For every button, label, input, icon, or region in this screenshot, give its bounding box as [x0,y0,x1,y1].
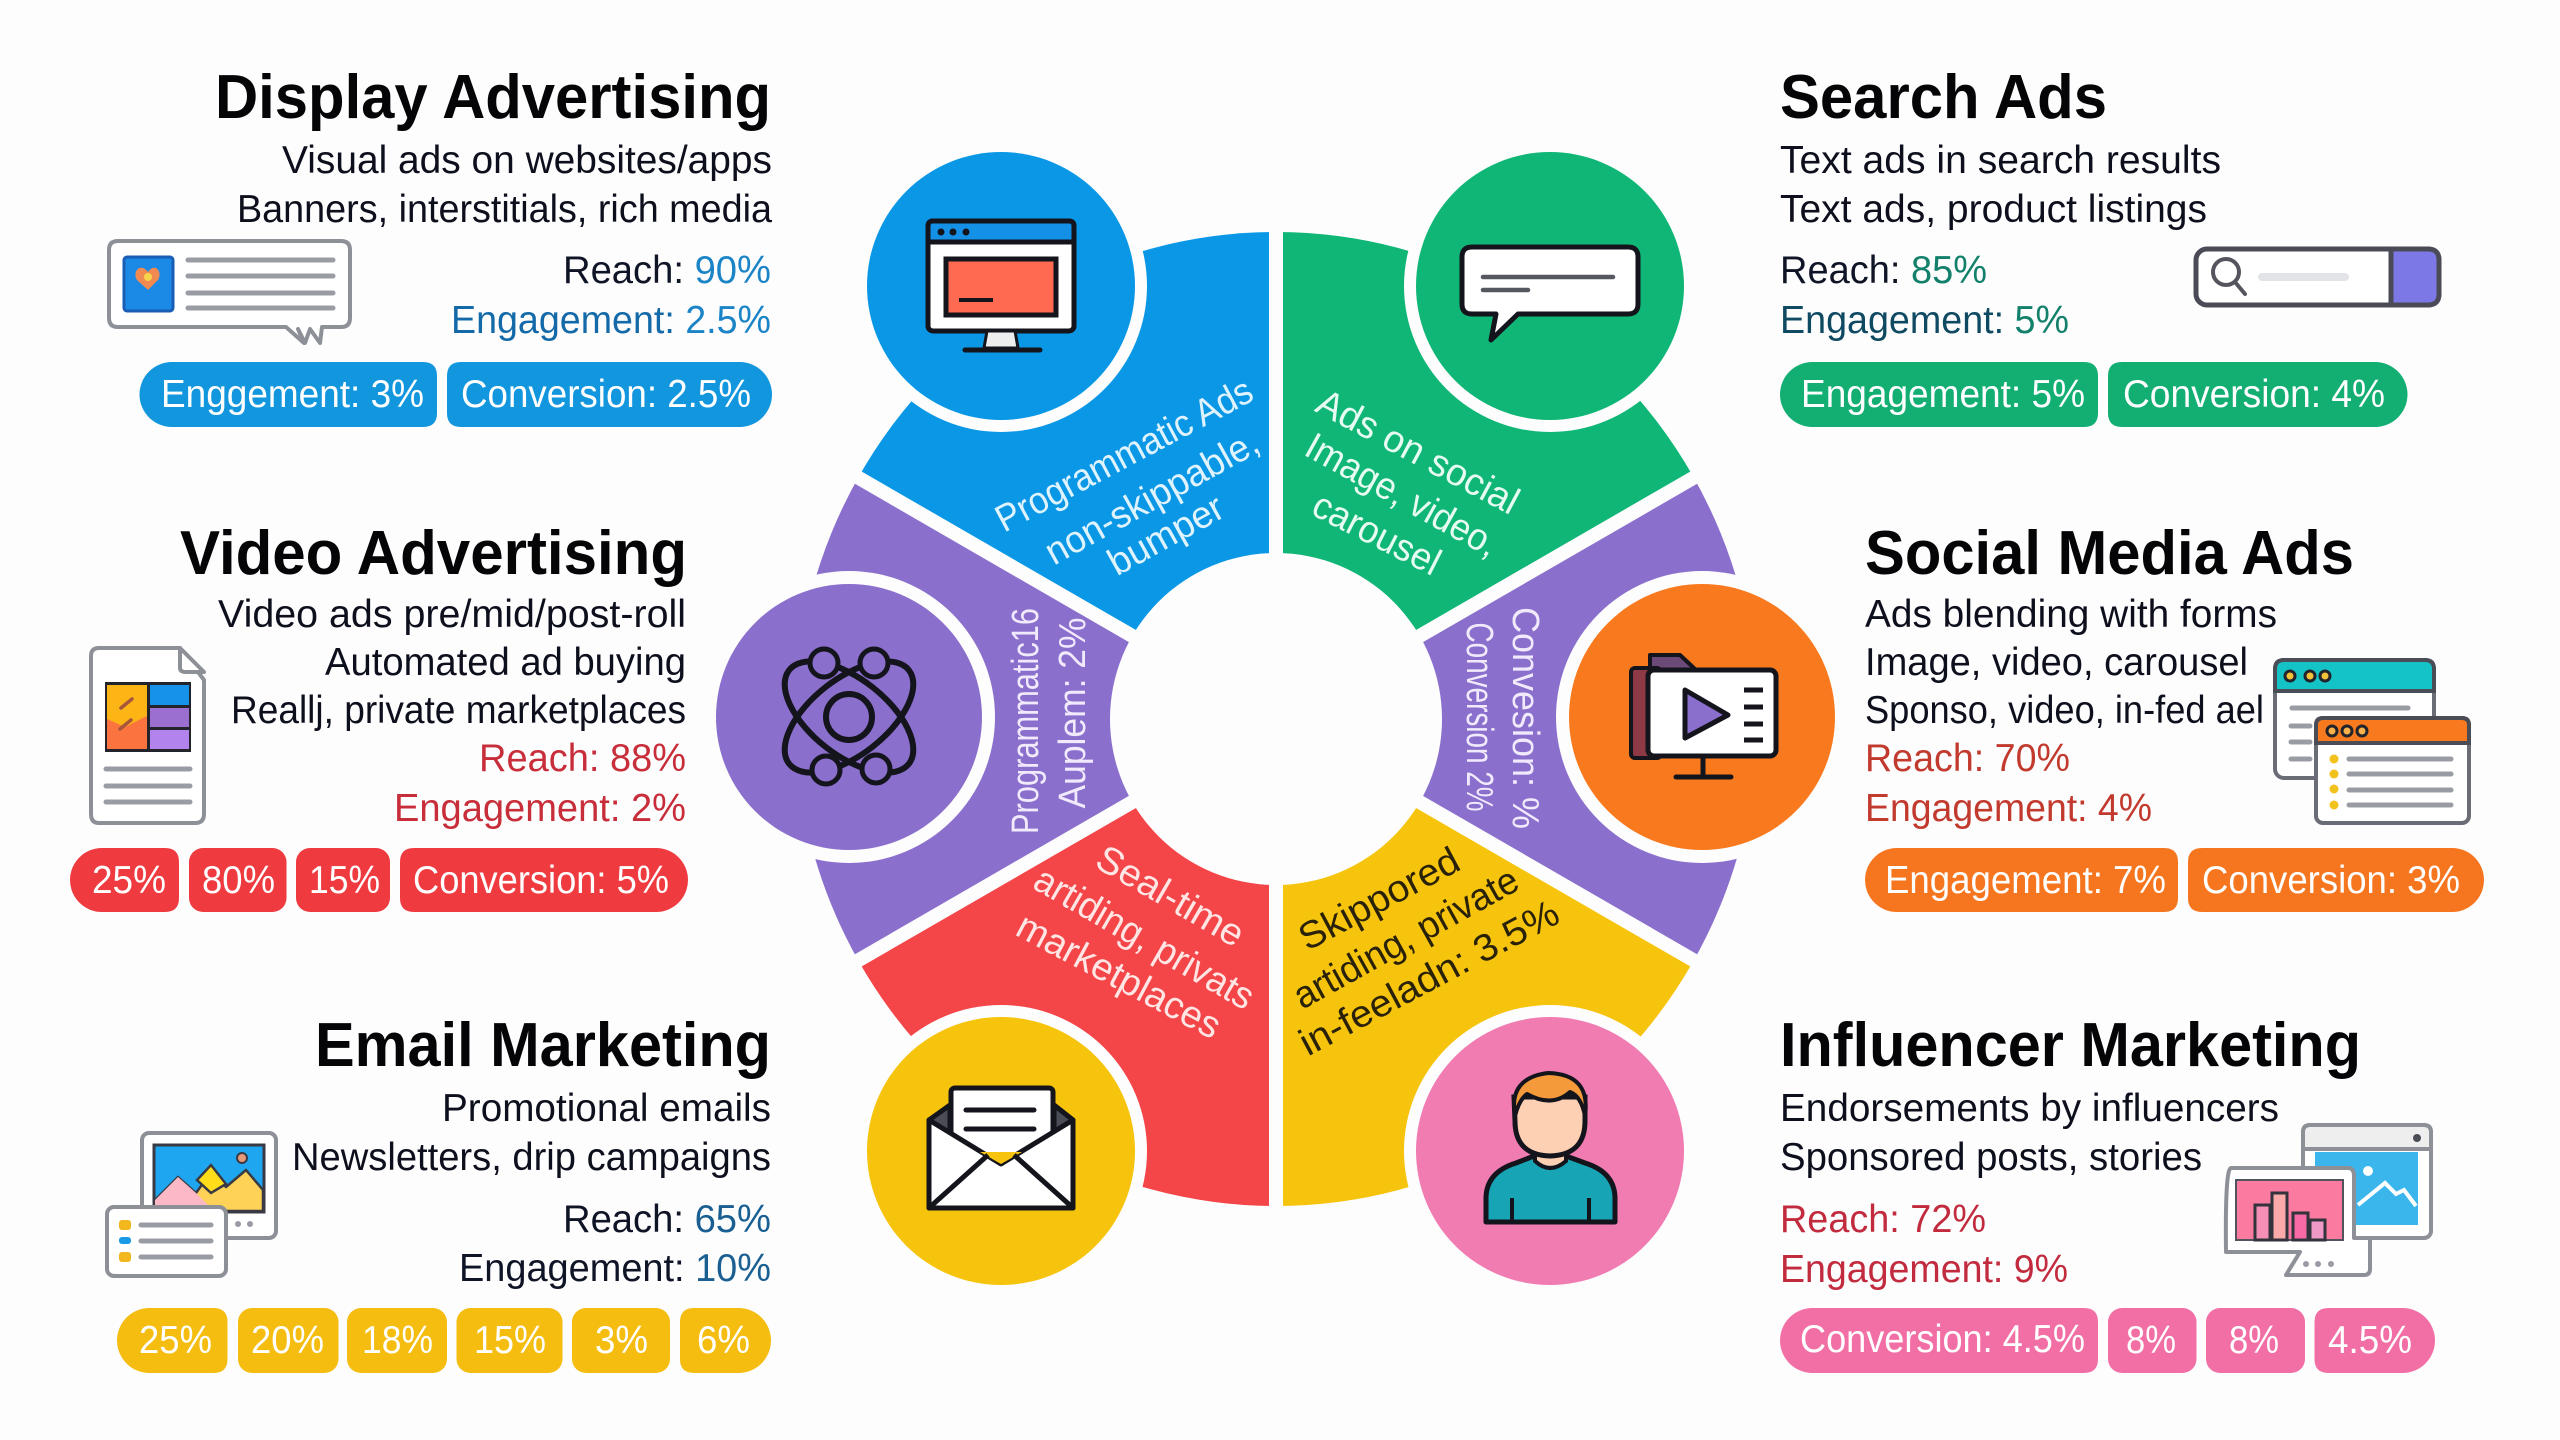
wheel text: yellow segment [1286,840,1566,1065]
heading: search ads: Search Ads [1780,63,2107,132]
description: email marketing: Promotional emails [442,1087,771,1130]
stat pills: influencer marketing: 8% [2229,1319,2279,1362]
metrics: video advertising [394,737,686,830]
metrics: email marketing: Engagement: 10% [459,1247,771,1290]
stat pills: influencer marketing: Conversion: 4.5% [1800,1318,2085,1361]
heading: influencer marketing: Influencer Marketing [1780,1011,2361,1080]
description: display advertising [237,139,773,231]
metrics: video advertising: Reach: 88% [479,737,686,780]
metrics: email marketing: Reach: 65% [563,1198,771,1241]
metrics: video advertising: Engagement: 2% [394,787,686,830]
stat pills: email marketing: 3% [595,1319,648,1362]
stat pills: search ads: Conversion: 4% [2123,373,2385,416]
metrics: display advertising [451,249,771,342]
heading: email marketing: Email Marketing [315,1011,771,1080]
stat pills: email marketing: 15% [474,1319,546,1362]
wheel text: purple left segment [1005,608,1094,834]
description: influencer marketing: Sponsored posts, stories [1780,1136,2202,1179]
panel: influencer marketing [1780,1011,2435,1373]
stat pills: email marketing: 6% [697,1319,750,1362]
description: search ads: Text ads, product listings [1780,188,2207,231]
wheel text: yellow segment: artiding, private [1286,859,1526,1018]
stat pills: search ads [1780,362,2408,427]
stat pills: email marketing: 25% [139,1319,212,1362]
description: social media ads: Sponso, video, in-fed ael [1865,689,2264,732]
stat pills: influencer marketing [1780,1308,2435,1373]
stat pills: social media ads: Conversion: 3% [2202,859,2460,902]
stat pills: email marketing: 18% [362,1319,433,1362]
segment: green [1276,232,1693,719]
description: display advertising: Banners, interstitials, rich media [237,188,773,231]
panel: email marketing [107,1011,771,1373]
description: email marketing: Newsletters, drip campaigns [292,1136,771,1179]
wheel text: blue segment: Programmatic Ads [989,370,1260,541]
description: display advertising: Visual ads on websites/apps [282,139,772,182]
wheel text: red segment: artiding, privats [1027,859,1261,1019]
stat pills: video advertising: 15% [309,859,380,902]
icon: green circle with chat bubble [1404,140,1696,432]
metrics: social media ads [1865,737,2152,830]
icon: pink circle with person [1404,1005,1696,1297]
wheel text: green segment: Image, video, [1298,425,1506,566]
stat pills: email marketing [117,1308,771,1373]
stat pills: video advertising: 25% [92,859,166,902]
wheel text: green segment: Ads on social [1309,382,1526,523]
icon: purple circle with network [703,571,995,863]
stat pills: social media ads [1865,848,2484,912]
metrics: social media ads: Reach: 70% [1865,737,2070,780]
description: video advertising [218,593,686,732]
stat pills: influencer marketing: 8% [2126,1319,2176,1362]
icon: stacked browser windows [2275,660,2469,823]
icon: document layout [91,648,204,823]
stat pills: influencer marketing: 4.5% [2328,1319,2412,1362]
metrics: display advertising: Reach: 90% [563,249,771,292]
description: influencer marketing [1780,1087,2279,1179]
heading: social media ads: Social Media Ads [1865,519,2354,588]
wheel text: yellow segment: in-feeladn: 3.5% [1292,892,1566,1065]
metrics: display advertising: Engagement: 2.5% [451,299,771,342]
panel: search ads [1780,63,2439,427]
wheel text: purple left segment: Programmatic16 [1005,608,1047,834]
description: social media ads: Image, video, carousel [1865,641,2248,684]
stat pills: search ads: Engagement: 5% [1801,373,2085,416]
wheel text: blue segment: bumper [1101,486,1232,584]
description: email marketing [292,1087,771,1179]
metrics: email marketing [459,1198,771,1290]
description: social media ads: Ads blending with forms [1865,593,2277,636]
stat pills: video advertising: Conversion: 5% [413,859,669,902]
wheel text: purple left segment: Auplem: 2% [1052,618,1094,808]
wheel text: yellow segment: Skippored [1292,840,1467,959]
wheel text: red segment: Seal-time [1088,837,1252,956]
panel: social media ads [1865,519,2484,912]
metrics: influencer marketing: Engagement: 9% [1780,1248,2068,1291]
description: search ads: Text ads in search results [1780,139,2221,182]
stat pills: display advertising: Conversion: 2.5% [461,373,751,416]
center hub [1110,553,1442,885]
description: video advertising: Video ads pre/mid/post-roll [218,593,686,636]
metrics: social media ads: Engagement: 4% [1865,787,2152,830]
segment: red [859,719,1276,1206]
stat pills: display advertising: Enggement: 3% [161,373,424,416]
stat pills: video advertising [70,848,688,912]
wheel text: purple right segment [1458,607,1546,829]
metrics: influencer marketing: Reach: 72% [1780,1198,1986,1241]
stat pills: email marketing: 20% [251,1319,324,1362]
icon: banner ad bubble [109,241,350,343]
stat pills: social media ads: Engagement: 7% [1885,859,2166,902]
description: influencer marketing: Endorsements by influencers [1780,1087,2279,1130]
stat pills: video advertising: 80% [202,859,275,902]
panel: video advertising [70,519,688,912]
segment: purple left [795,476,1276,962]
stat pills: display advertising [140,362,772,427]
description: video advertising: Reallj, private marketplaces [231,689,686,732]
description: search ads [1780,139,2221,231]
metrics: search ads: Engagement: 5% [1780,299,2069,342]
segment: yellow [1276,719,1693,1206]
wheel text: red segment: marketplaces [1009,905,1228,1048]
segment: blue [859,232,1276,719]
segment: purple right [1276,476,1757,962]
icon: orange circle with video player [1556,571,1848,863]
metrics: influencer marketing [1780,1198,2068,1291]
wheel text: purple right segment: Conversion 2% [1458,622,1500,812]
metrics: search ads: Reach: 85% [1780,249,1987,292]
icon: yellow circle with envelope [855,1005,1147,1297]
icon: image window and list card [107,1133,276,1276]
description: video advertising: Automated ad buying [325,641,686,684]
panel: display advertising [109,63,773,427]
heading: display advertising: Display Advertising [215,63,771,132]
wheel text: blue segment: non-skippable, [1038,421,1266,574]
icon: search bar [2196,249,2439,305]
icon: chart and image windows [2226,1125,2431,1275]
description: social media ads [1865,593,2277,732]
central segmented wheel [795,200,1757,1240]
wheel text: purple right segment: Convesion: % [1504,607,1546,829]
wheel text: green segment: carousel [1305,484,1447,584]
heading: video advertising: Video Advertising [180,519,687,588]
icon: blue circle with monitor [855,140,1147,432]
metrics: search ads [1780,249,2069,342]
